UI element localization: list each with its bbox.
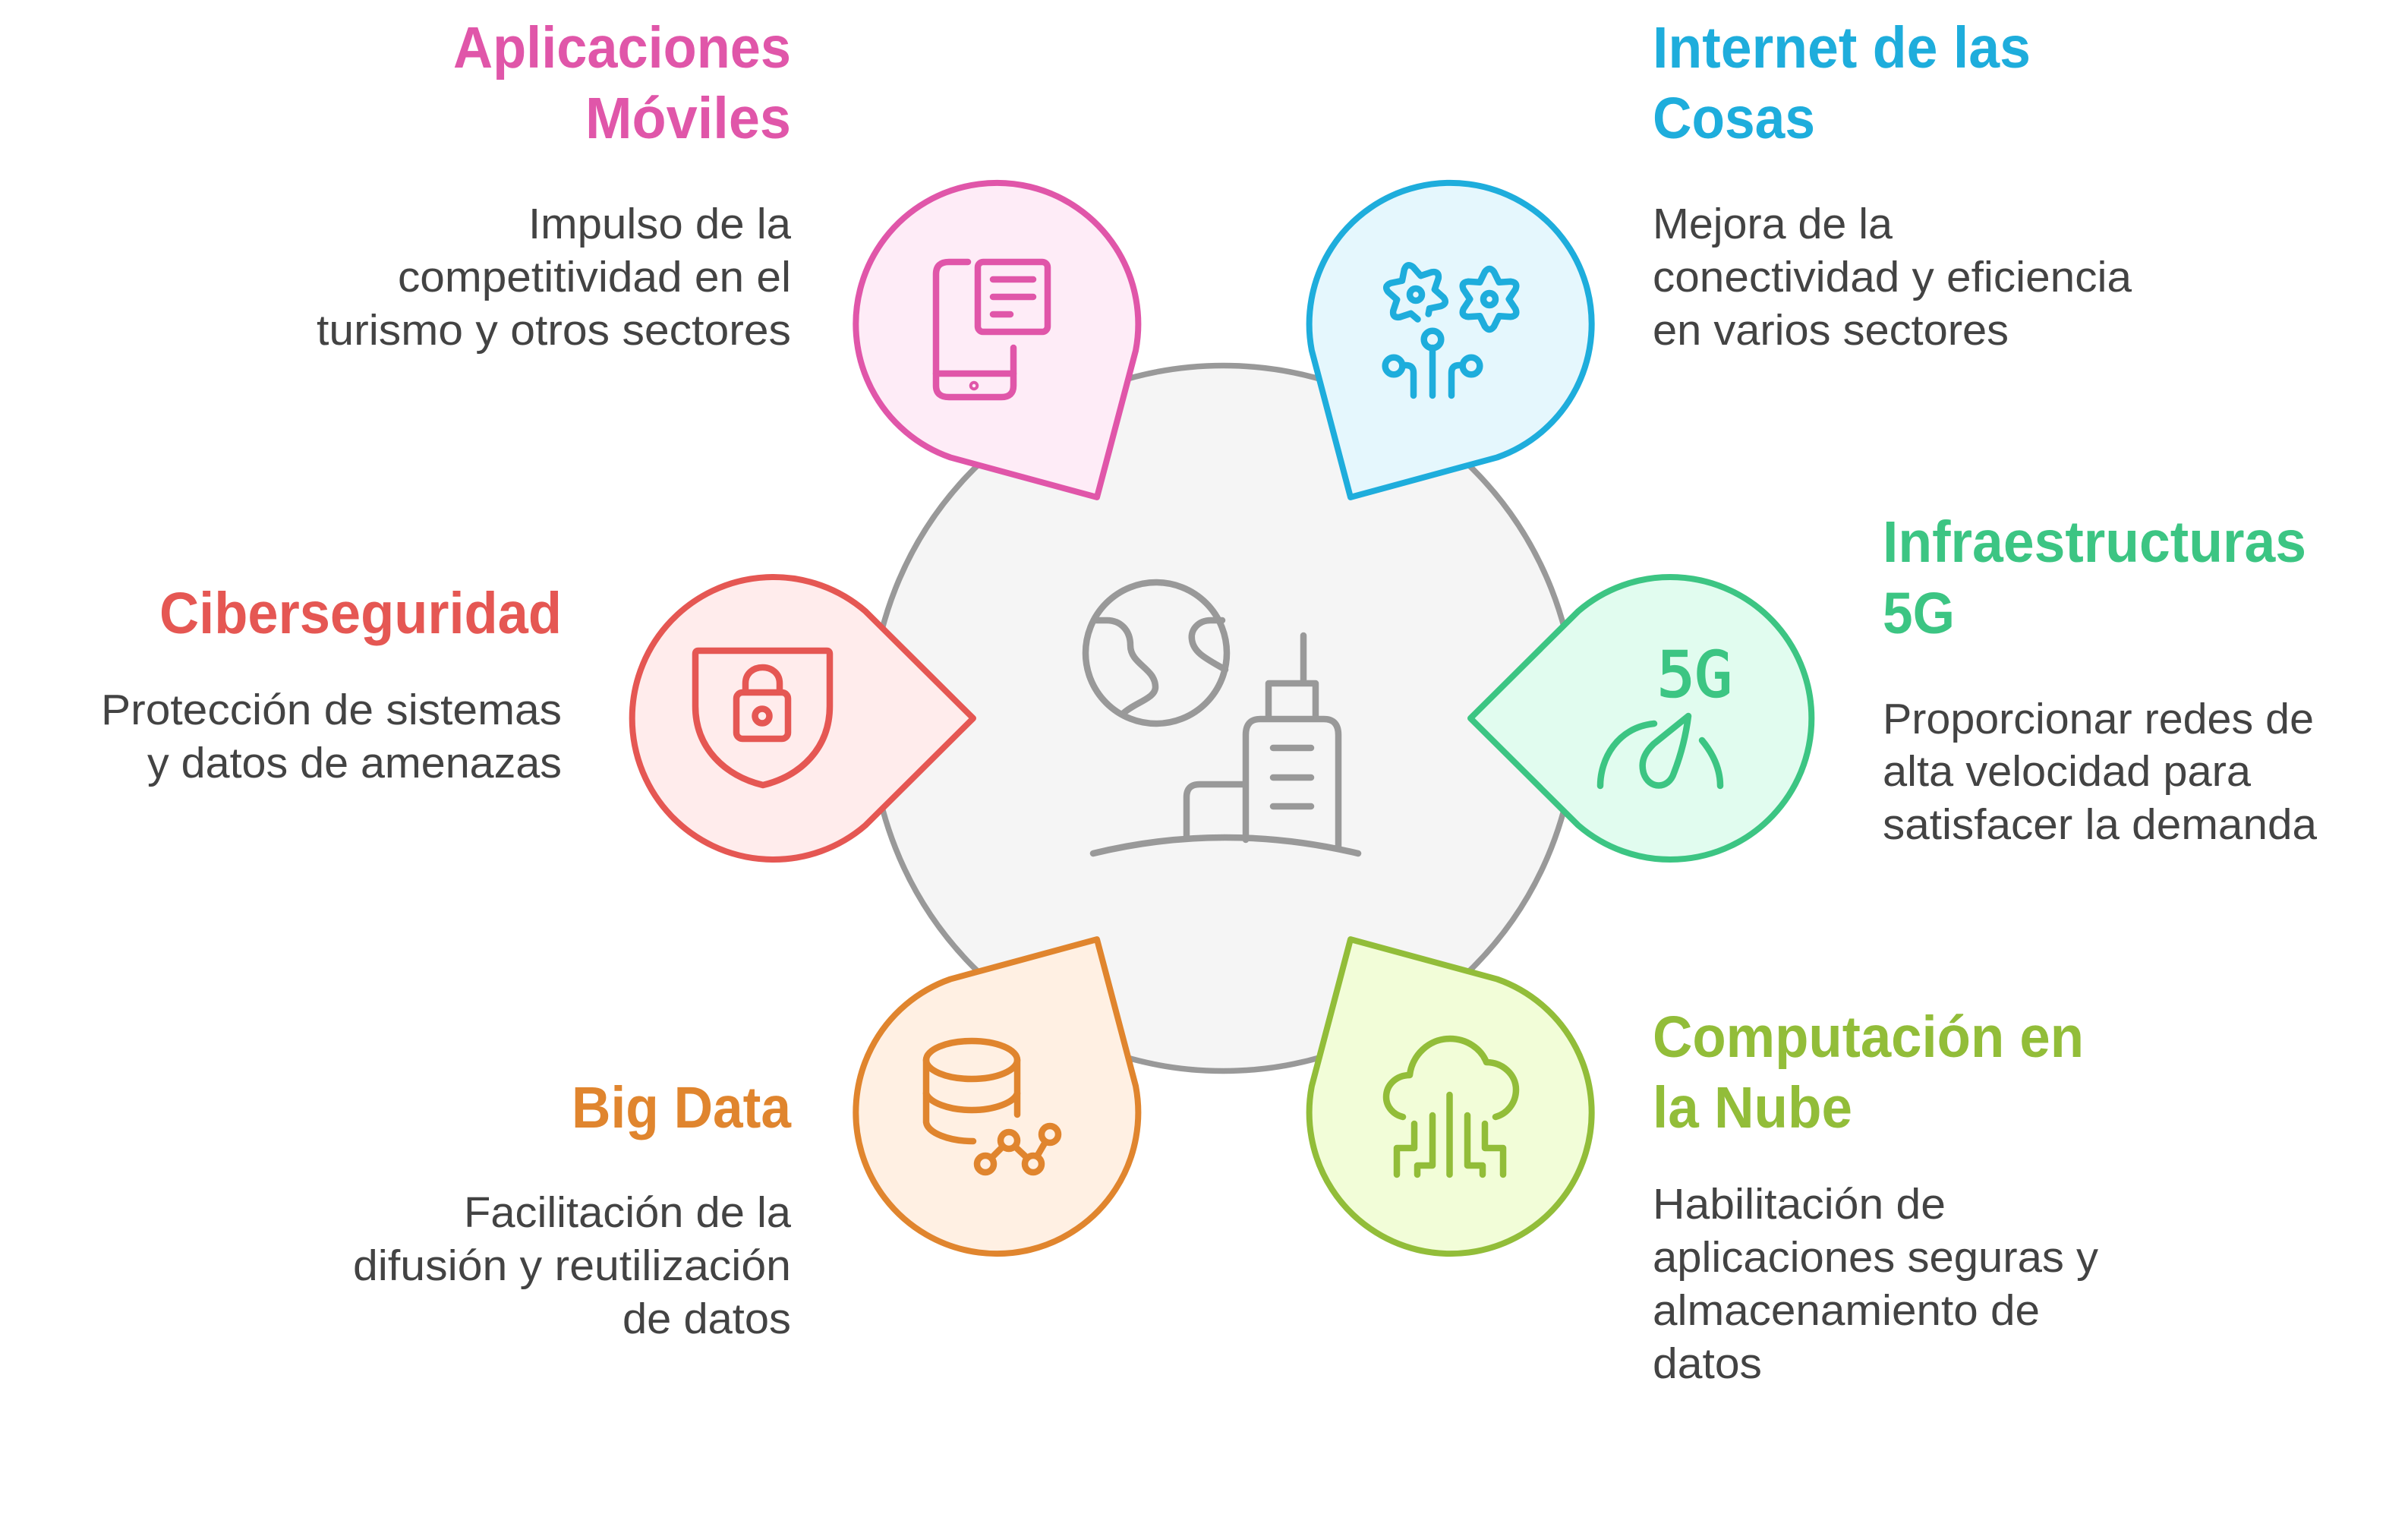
heading: Aplicaciones Móviles: Aplicaciones bbox=[453, 15, 791, 80]
bubble: Internet de las Cosas bbox=[1228, 131, 1644, 568]
description: Computación en la Nube bbox=[1653, 1180, 2099, 1388]
description: Infraestructuras 5G: Proporcionar redes de bbox=[1883, 695, 2314, 743]
description: Ciberseguridad: y datos de amenazas bbox=[147, 739, 562, 787]
text: Computación en la Nube bbox=[1653, 1005, 2099, 1388]
heading: Infraestructuras 5G: Infraestructuras bbox=[1883, 509, 2306, 575]
heading: Infraestructuras 5G bbox=[1883, 509, 2306, 646]
description: Aplicaciones Móviles: Impulso de la bbox=[528, 200, 791, 248]
text: Ciberseguridad bbox=[101, 581, 562, 787]
heading: Internet de las Cosas: Internet de las bbox=[1653, 15, 2031, 80]
description: Aplicaciones Móviles bbox=[317, 200, 791, 355]
heading: Infraestructuras 5G: 5G bbox=[1883, 581, 1955, 646]
text: Infraestructuras 5G bbox=[1883, 509, 2317, 849]
description: Internet de las Cosas: conectividad y eficiencia bbox=[1653, 253, 2132, 301]
heading: Computación en la Nube bbox=[1653, 1005, 2084, 1140]
description: Aplicaciones Móviles: turismo y otros sectores bbox=[317, 306, 791, 355]
central circle bbox=[871, 366, 1576, 1071]
text: Internet de las Cosas bbox=[1653, 15, 2132, 355]
bubble: Infraestructuras 5G bbox=[1470, 577, 1811, 860]
bubble: Ciberseguridad bbox=[632, 577, 973, 860]
description: Ciberseguridad bbox=[101, 686, 562, 787]
description: Computación en la Nube: aplicaciones seguras y bbox=[1653, 1233, 2099, 1282]
bubble: Computación en la Nube bbox=[1228, 869, 1644, 1305]
description: Big Data bbox=[353, 1188, 791, 1343]
description: Ciberseguridad: Protección de sistemas bbox=[101, 686, 562, 734]
heading: Computación en la Nube: la Nube bbox=[1653, 1075, 1852, 1140]
icon: globe and city bbox=[1086, 582, 1358, 853]
text: Big Data bbox=[353, 1075, 792, 1343]
icon: 5G speed gauge bbox=[1600, 639, 1732, 786]
description: Infraestructuras 5G bbox=[1883, 695, 2317, 849]
heading: Aplicaciones Móviles: Móviles bbox=[585, 86, 791, 151]
heading: Aplicaciones Móviles bbox=[453, 15, 791, 151]
text: Aplicaciones Móviles bbox=[317, 15, 791, 355]
description: Aplicaciones Móviles: competitividad en el bbox=[398, 253, 791, 301]
icon: cloud circuit bbox=[1386, 1039, 1516, 1175]
description: Big Data: de datos bbox=[622, 1295, 791, 1343]
heading: Internet de las Cosas: Cosas bbox=[1653, 86, 1815, 151]
icon: gears and circuit bbox=[1382, 258, 1516, 396]
icon: shield with padlock bbox=[695, 651, 830, 785]
description: Computación en la Nube: datos bbox=[1653, 1339, 1762, 1388]
description: Computación en la Nube: almacenamiento de bbox=[1653, 1286, 2040, 1335]
bubble: Aplicaciones Móviles bbox=[804, 131, 1219, 568]
icon: database with graph bbox=[926, 1041, 1058, 1172]
description: Computación en la Nube: Habilitación de bbox=[1653, 1180, 1946, 1229]
description: Internet de las Cosas: en varios sectores bbox=[1653, 306, 2009, 355]
description: Internet de las Cosas bbox=[1653, 200, 2132, 355]
heading: Ciberseguridad: Ciberseguridad bbox=[159, 581, 562, 646]
heading: Internet de las Cosas bbox=[1653, 15, 2031, 151]
description: Big Data: difusión y reutilización bbox=[353, 1241, 791, 1290]
heading: Computación en la Nube: Computación en bbox=[1653, 1005, 2084, 1070]
icon: mobile phone with document bbox=[936, 262, 1048, 397]
icon: 5G speed gauge: 5G bbox=[1657, 639, 1732, 711]
description: Internet de las Cosas: Mejora de la bbox=[1653, 200, 1893, 248]
heading: Big Data: Big Data bbox=[572, 1075, 792, 1140]
bubble: Big Data bbox=[804, 869, 1219, 1305]
description: Infraestructuras 5G: alta velocidad para bbox=[1883, 747, 2251, 796]
description: Big Data: Facilitación de la bbox=[464, 1188, 791, 1237]
description: Infraestructuras 5G: satisfacer la demanda bbox=[1883, 800, 2317, 849]
